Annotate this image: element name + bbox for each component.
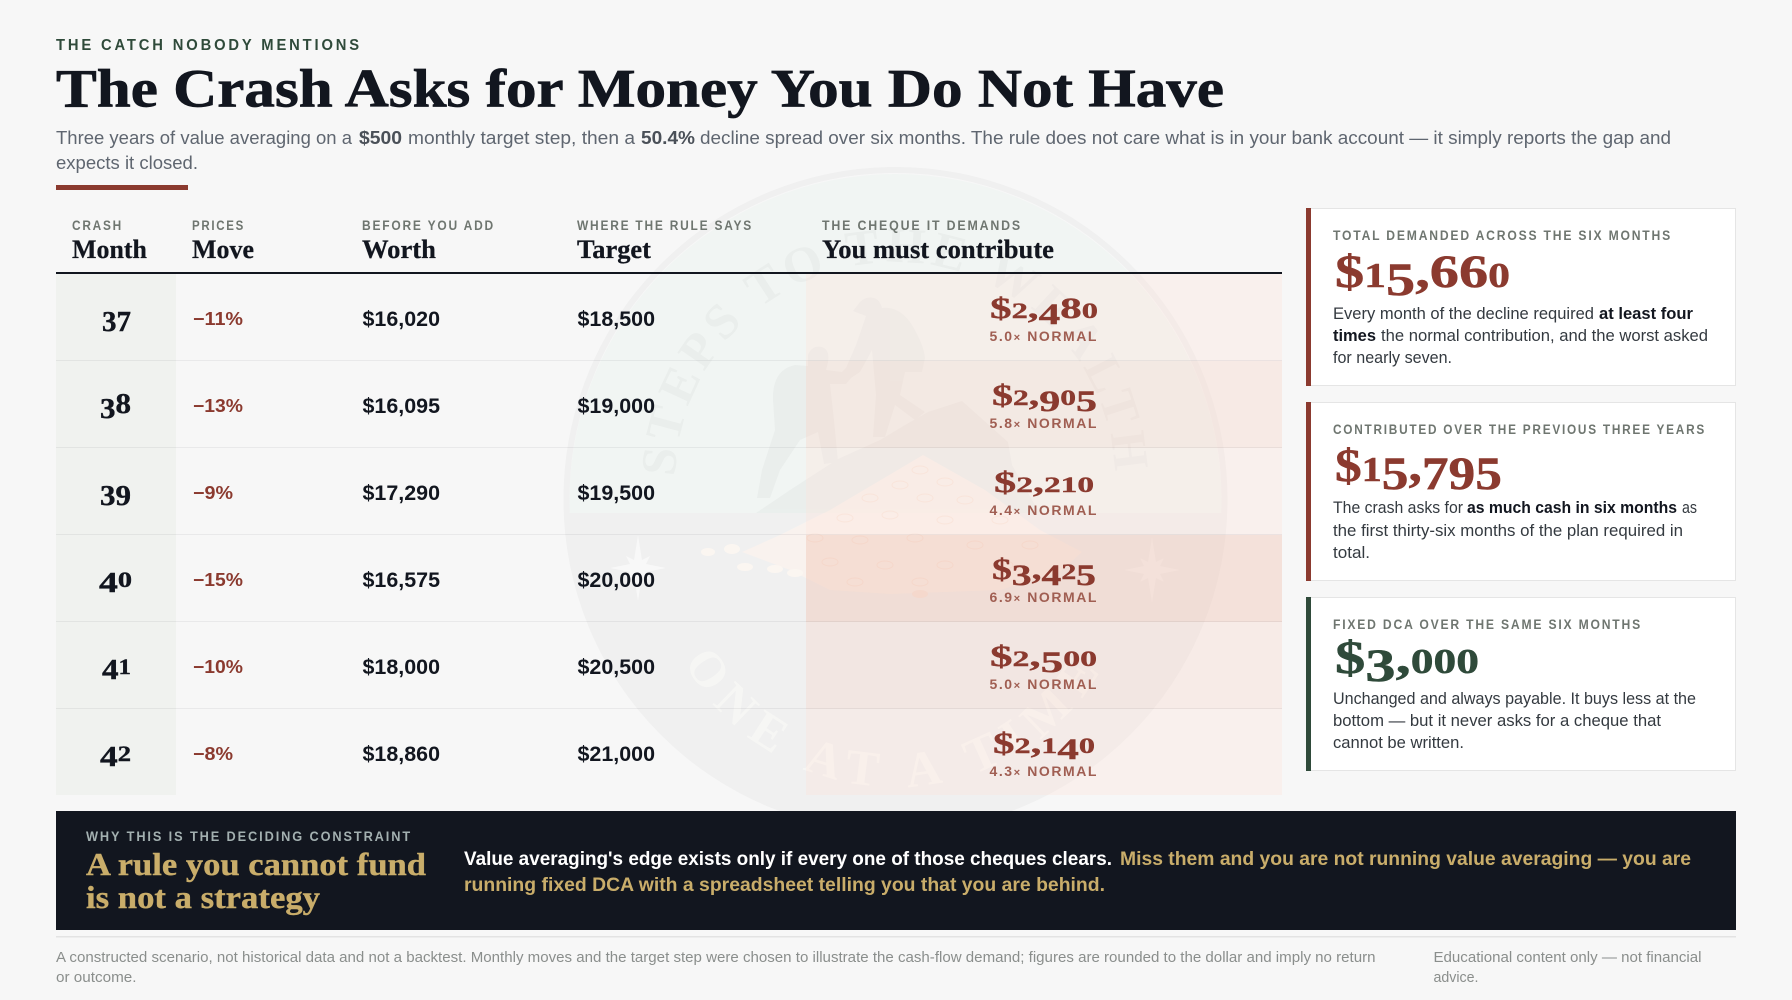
- subtitle: $500: [359, 127, 402, 148]
- callout statement: [464, 849, 1691, 896]
- row 42: 0: [1079, 733, 1095, 758]
- subtitle: expects it closed.: [56, 152, 198, 173]
- card: total demanded: 5: [1386, 254, 1415, 306]
- card: fixed DCA: 3: [1365, 640, 1396, 692]
- table column headers: WHERE THE RULE SAYS: [577, 218, 753, 233]
- compass star left: [610, 535, 666, 601]
- disclaimer: [1434, 949, 1702, 986]
- row 38: −13%: [193, 396, 243, 416]
- card: fixed DCA: ,: [1396, 632, 1411, 684]
- seal lettering: top arc: STEPS TO THE WEALTH: [630, 216, 1161, 478]
- card: total demanded: the normal contribution, and the worst asked: [1381, 326, 1708, 345]
- subtitle: monthly target step, then a: [408, 127, 636, 148]
- callout heading: A rule you cannot fund: [86, 846, 426, 882]
- callout bar: [56, 811, 1736, 930]
- row 38: 5: [1076, 385, 1097, 418]
- row 40: [99, 553, 1098, 605]
- row 40: 0: [118, 568, 132, 592]
- row 37: 0: [1082, 298, 1098, 323]
- row 40: 4: [1042, 559, 1061, 592]
- compass star right: [1124, 537, 1180, 603]
- row 38: 3: [100, 393, 116, 425]
- card: previously contributed: 795: [1422, 448, 1502, 500]
- callout eyebrow: WHY THIS IS THE DECIDING CONSTRAINT: [86, 829, 412, 844]
- row 42: $18,860: [362, 743, 440, 766]
- row 37: $16,020: [362, 308, 440, 331]
- row 40: 6.9× NORMAL: [990, 590, 1098, 605]
- card: total demanded: at least four: [1599, 304, 1693, 323]
- card: previously contributed: $1: [1335, 440, 1379, 492]
- callout statement: Miss them and you are not running value averaging — you are: [1120, 849, 1691, 870]
- footnote: A constructed scenario, not historical data and not a backtest. Monthly moves and the target step were chosen to illustrate the cash-flow demand; figures are rounded to the dollar and imply no return: [56, 949, 1376, 966]
- row 41: 1: [119, 655, 131, 679]
- row 42: $ 2,1: [993, 727, 1053, 760]
- row 40: 3: [1012, 559, 1032, 592]
- row 41: $ 2,: [990, 640, 1037, 673]
- card: previously contributed: [1306, 402, 1736, 581]
- row 40: 2: [1061, 559, 1076, 584]
- subtitle: Three years of value averaging on a: [56, 127, 353, 148]
- table column headers: PRICES: [192, 218, 245, 233]
- subtitle: 50.4%: [641, 127, 695, 148]
- row 38: [100, 379, 1098, 431]
- table column headers: [72, 218, 1054, 264]
- row 41: −10%: [193, 657, 243, 677]
- row 40: ,: [1032, 553, 1042, 586]
- row 37: $ 2,: [990, 292, 1035, 325]
- table column headers: You must contribute: [822, 235, 1054, 264]
- row 37: 5.0× NORMAL: [990, 329, 1098, 344]
- cheque column shading: [806, 274, 1282, 795]
- row 39: $17,290: [362, 482, 440, 505]
- card: fixed DCA: Unchanged and always payable. It buys less at the: [1333, 689, 1696, 708]
- row 39: −9%: [193, 483, 233, 503]
- subtitle: [56, 127, 1671, 173]
- row 38: 9: [1039, 385, 1060, 418]
- card: total demanded: Every month of the decline required: [1333, 304, 1594, 323]
- row 40: 4: [99, 567, 118, 599]
- card: total demanded: 66 0: [1430, 246, 1506, 298]
- card: fixed DCA: bottom — but it never asks for a cheque that: [1333, 711, 1661, 730]
- row 37: $18,500: [578, 308, 655, 331]
- row 38: 5.8× NORMAL: [990, 416, 1098, 431]
- row 37: 8: [1060, 292, 1082, 325]
- card: previously contributed: ,: [1408, 440, 1422, 492]
- footnote: [56, 949, 1376, 986]
- disclaimer: advice.: [1434, 969, 1478, 986]
- card: previously contributed: as much cash in six months: [1467, 498, 1677, 517]
- row 40: $: [992, 553, 1007, 586]
- row 42: 4: [1057, 733, 1079, 766]
- row 37: [102, 292, 1098, 344]
- table column headers: Month: [72, 235, 148, 264]
- row 42: 4: [100, 741, 118, 773]
- row 39: $ 2,210: [994, 466, 1094, 499]
- card: total demanded: $1: [1335, 246, 1382, 298]
- row 38: $16,095: [362, 395, 440, 418]
- row 41: [102, 640, 1098, 692]
- subtitle: decline spread over six months. The rule does not care what is in your bank account — it simply reports the gap and: [700, 127, 1671, 148]
- watermark: steps to the wealth seal: [643, 228, 1148, 598]
- row 38: $ 2,: [992, 379, 1036, 412]
- row 39: 39: [100, 480, 131, 512]
- row 41: 5: [1041, 646, 1063, 679]
- row 42: 2: [118, 742, 131, 766]
- title: The Crash Asks for Money You Do Not Have: [56, 58, 1224, 118]
- footnote: or outcome.: [56, 969, 136, 986]
- card: total demanded: [1306, 208, 1736, 386]
- callout heading: [86, 846, 426, 915]
- table column headers: Move: [192, 235, 254, 264]
- table column headers: BEFORE YOU ADD: [362, 218, 495, 233]
- row 40: $16,575: [362, 569, 440, 592]
- row 40: 5: [1076, 559, 1096, 592]
- row 42: [100, 727, 1098, 779]
- card: previously contributed: total.: [1333, 543, 1370, 562]
- card: total demanded: times: [1333, 326, 1376, 345]
- card: previously contributed: The crash asks for: [1333, 498, 1463, 517]
- callout statement: running fixed DCA with a spreadsheet telling you that you are behind.: [464, 875, 1105, 896]
- row 38: 8: [116, 388, 131, 420]
- table column headers: Worth: [362, 235, 437, 264]
- card: total demanded: ,: [1415, 246, 1430, 298]
- row 38: 0: [1060, 385, 1076, 410]
- table column headers: THE CHEQUE IT DEMANDS: [822, 218, 1022, 233]
- row 40: −15%: [193, 570, 243, 590]
- row 41: $18,000: [362, 656, 440, 679]
- row 41: 00: [1063, 646, 1097, 671]
- table: [56, 218, 1282, 795]
- callout statement: Value averaging's edge exists only if every one of those cheques clears.: [464, 849, 1112, 870]
- callout heading: is not a strategy: [86, 879, 320, 915]
- row 41: 5.0× NORMAL: [990, 677, 1098, 692]
- row 41: $20,500: [578, 656, 655, 679]
- row 37: 37: [102, 306, 131, 338]
- card: previously contributed: CONTRIBUTED OVER THE PREVIOUS THREE YEARS: [1333, 422, 1706, 437]
- row 39: [100, 466, 1098, 518]
- card: fixed DCA: [1306, 597, 1736, 771]
- row 42: $21,000: [578, 743, 655, 766]
- table column headers: CRASH: [72, 218, 123, 233]
- row 38: $19,000: [578, 395, 655, 418]
- row 39: $19,500: [578, 482, 655, 505]
- month column shading: [56, 274, 176, 795]
- card: previously contributed: 5: [1382, 448, 1408, 500]
- row 42: −8%: [193, 744, 233, 764]
- row 41: 4: [102, 654, 119, 686]
- card: total demanded: for nearly seven.: [1333, 348, 1452, 367]
- row 39: 4.4× NORMAL: [990, 503, 1098, 518]
- seal lettering: bottom arc: ONE AT A TIME: [674, 637, 1116, 799]
- coin pile: [701, 455, 1082, 598]
- eyebrow: THE CATCH NOBODY MENTIONS: [56, 37, 362, 54]
- hikers and rock silhouette: [756, 298, 1040, 513]
- card: total demanded: TOTAL DEMANDED ACROSS THE SIX MONTHS: [1333, 228, 1672, 243]
- card: fixed DCA: $: [1335, 632, 1358, 684]
- row 40: $20,000: [578, 569, 655, 592]
- row 42: 4.3× NORMAL: [990, 764, 1098, 779]
- card: fixed DCA: cannot be written.: [1333, 733, 1464, 752]
- disclaimer: Educational content only — not financial: [1434, 949, 1702, 966]
- card: fixed DCA: 000: [1411, 642, 1479, 681]
- card: fixed DCA: FIXED DCA OVER THE SAME SIX MONTHS: [1333, 617, 1642, 632]
- row 37: −11%: [193, 309, 243, 329]
- card: previously contributed: as: [1682, 498, 1697, 517]
- row 37: 4: [1039, 298, 1060, 331]
- header block: [56, 37, 1671, 190]
- accent rule: [56, 185, 188, 190]
- card: previously contributed: the first thirty-six months of the plan required in: [1333, 521, 1683, 540]
- table column headers: Target: [577, 235, 651, 264]
